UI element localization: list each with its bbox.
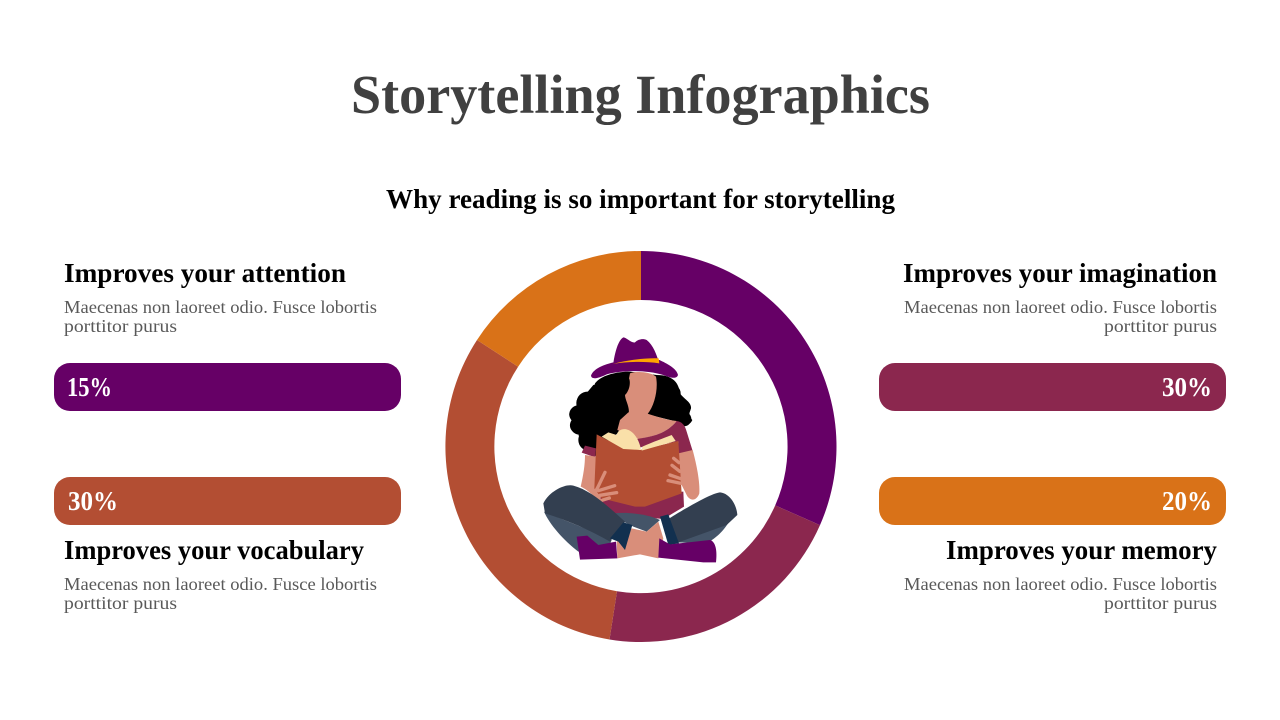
icon: woman reading a book bbox=[543, 337, 737, 562]
segment: purple 30% bbox=[641, 251, 836, 525]
panel: memory bbox=[879, 477, 1226, 613]
heading: vocabulary: Improves your vocabulary bbox=[64, 535, 364, 565]
donut chart bbox=[445, 251, 836, 642]
bar: 20%: 20% bbox=[1162, 486, 1212, 516]
segment: rust 30% bbox=[445, 340, 617, 640]
panel: imagination bbox=[879, 258, 1226, 411]
text: memory description bbox=[904, 574, 1217, 613]
segment: maroon 20% bbox=[610, 505, 820, 642]
text: memory description: Maecenas non laoreet odio. Fusce lobortis bbox=[904, 574, 1217, 594]
segment: orange 15% bbox=[477, 251, 641, 367]
text: attention description bbox=[64, 297, 377, 336]
text: imagination description: porttitor purus bbox=[1104, 316, 1217, 336]
text: vocabulary description: Maecenas non laoreet odio. Fusce lobortis bbox=[64, 574, 377, 594]
text: attention description: porttitor purus bbox=[64, 316, 177, 336]
bar: 30%: 30% bbox=[1162, 372, 1212, 402]
text: vocabulary description bbox=[64, 574, 377, 613]
text: vocabulary description: porttitor purus bbox=[64, 593, 177, 613]
panel: attention bbox=[54, 258, 401, 411]
text: imagination description: Maecenas non laoreet odio. Fusce lobortis bbox=[904, 297, 1217, 317]
title: Storytelling Infographics bbox=[351, 64, 930, 125]
bar: 15%: 15% bbox=[67, 372, 112, 402]
text: imagination description bbox=[904, 297, 1217, 336]
heading: imagination: Improves your imagination bbox=[903, 258, 1217, 288]
bar: 30% bbox=[54, 477, 401, 525]
bar: 20% bbox=[879, 477, 1226, 525]
bar: 15% bbox=[54, 363, 401, 411]
subtitle: Why reading is so important for storytelling bbox=[386, 184, 895, 214]
text: attention description: Maecenas non laoreet odio. Fusce lobortis bbox=[64, 297, 377, 317]
bar: 30%: 30% bbox=[68, 486, 118, 516]
text: memory description: porttitor purus bbox=[1104, 593, 1217, 613]
bar: 30% bbox=[879, 363, 1226, 411]
panel: vocabulary bbox=[54, 477, 401, 613]
heading: attention: Improves your attention bbox=[64, 258, 346, 288]
heading: memory: Improves your memory bbox=[946, 535, 1217, 565]
